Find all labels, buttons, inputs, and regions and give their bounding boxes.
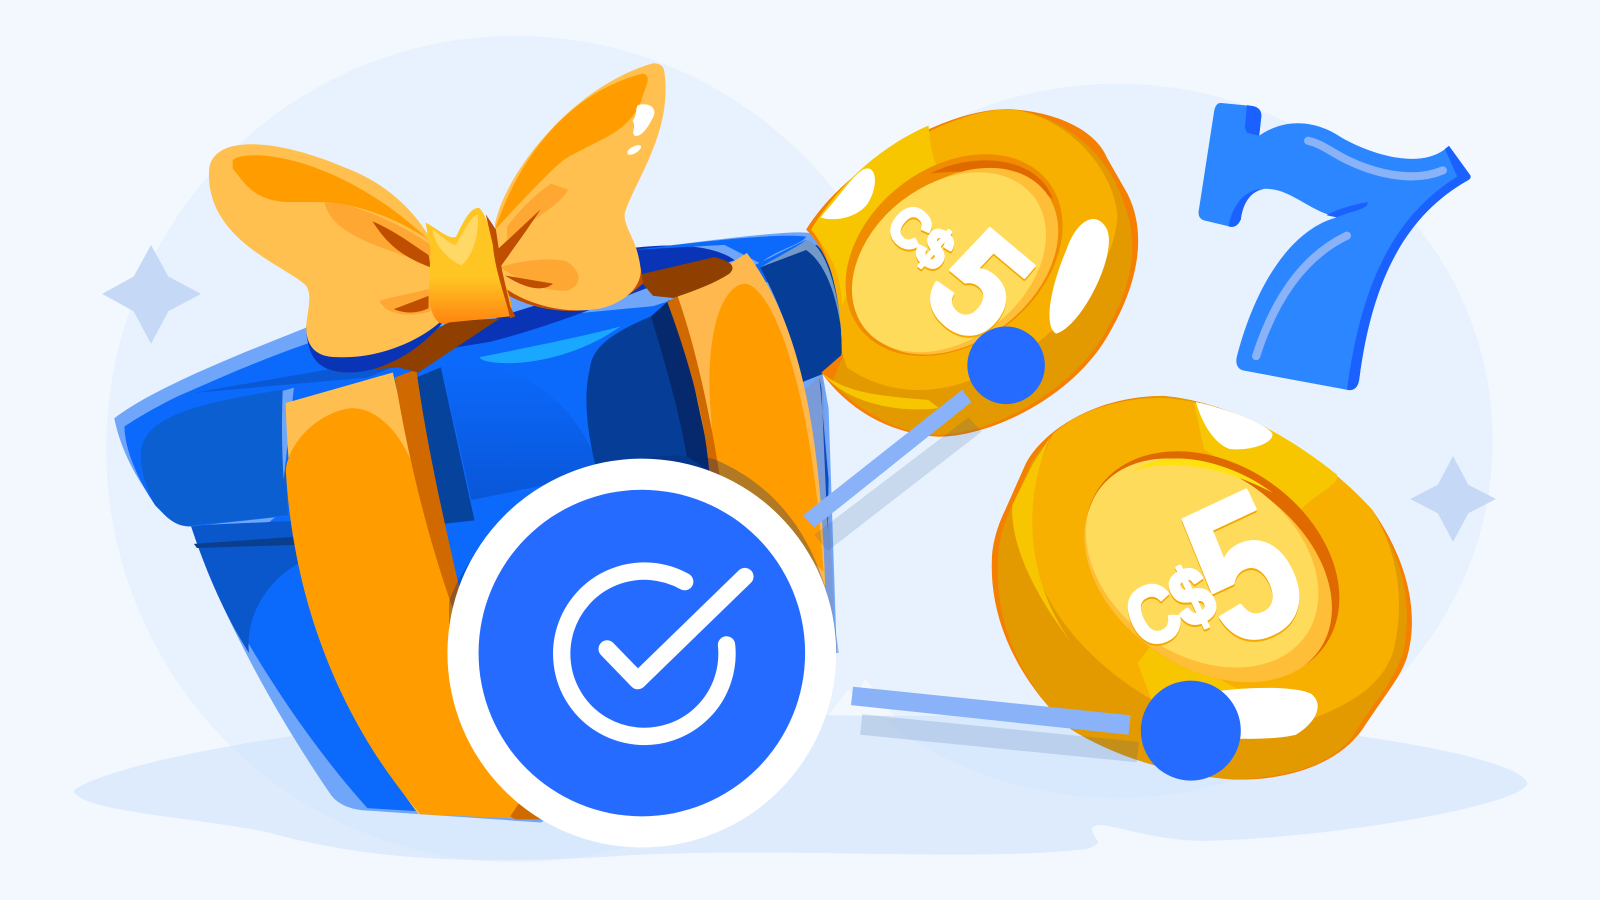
connector line: top coin shadow xyxy=(814,417,982,551)
coin bottom face xyxy=(1041,404,1384,729)
star: faint centre xyxy=(832,679,896,719)
badge disc xyxy=(447,459,836,847)
gift lid xyxy=(114,232,845,527)
star: right xyxy=(1410,456,1496,542)
bow highlights xyxy=(628,104,654,155)
background blob: right xyxy=(742,84,1493,798)
check icon xyxy=(562,571,745,736)
left ribbon xyxy=(286,369,546,819)
connector line: bottom coin xyxy=(851,687,1131,735)
coin top label: C$ xyxy=(876,192,966,282)
dot: bottom coin xyxy=(1141,681,1241,781)
ribbon shadow under bow xyxy=(337,257,733,372)
coin bottom label: 5 xyxy=(1154,447,1334,690)
badge xyxy=(447,459,836,847)
badge shadow on gift xyxy=(449,456,839,653)
coin top rim xyxy=(806,109,1138,437)
right ribbon xyxy=(667,253,826,602)
gift box xyxy=(114,232,845,822)
coin top face xyxy=(806,112,1102,398)
connector line: top coin xyxy=(803,390,971,528)
bow knot xyxy=(426,208,515,324)
ground shadow xyxy=(73,713,1528,860)
seven highlights xyxy=(1256,141,1443,356)
coin bottom xyxy=(992,396,1412,780)
coin top xyxy=(806,109,1138,437)
background blob: left xyxy=(106,36,924,862)
gift body xyxy=(191,373,837,822)
seven shading xyxy=(1229,105,1471,390)
coin bottom label: C$ xyxy=(1112,548,1228,666)
bow xyxy=(209,63,666,372)
coin top label: 5 xyxy=(897,199,1061,373)
connector line: bottom coin shadow xyxy=(860,714,1139,762)
bow left wing xyxy=(209,144,444,372)
star: left xyxy=(102,245,201,344)
dot: top coin xyxy=(967,327,1045,404)
slot seven xyxy=(1199,103,1471,390)
bow right wing xyxy=(495,63,666,311)
coin bottom rim xyxy=(992,396,1412,780)
